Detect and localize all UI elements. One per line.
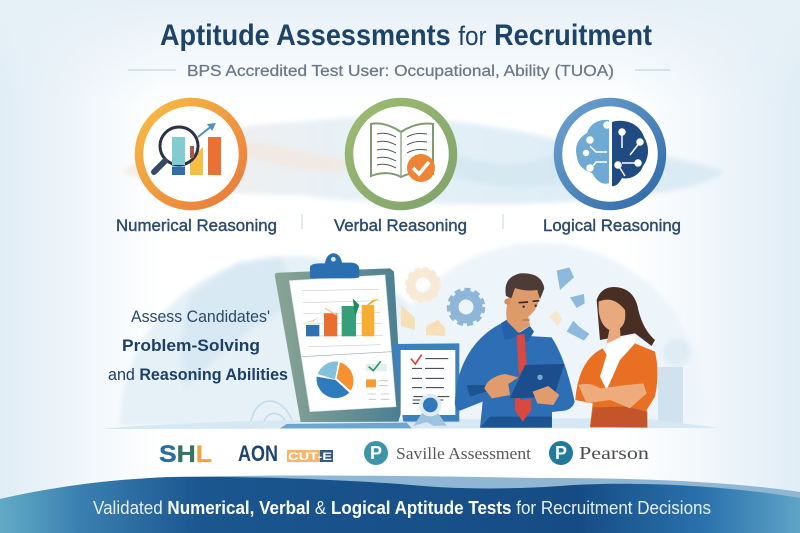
certificate bbox=[392, 343, 459, 426]
title: Aptitude Assessments for Recruitment bbox=[160, 19, 652, 52]
clipboard paper bbox=[289, 275, 396, 412]
gear: beige bbox=[407, 269, 439, 301]
certificate seal bbox=[413, 413, 447, 426]
necktie bbox=[515, 334, 531, 422]
logo: Pearson: Pearson bbox=[579, 443, 649, 463]
subtitle: BPS Accredited Test User: Occupational, Ability (TUOA) bbox=[187, 63, 614, 80]
clipboard clip bbox=[310, 253, 359, 278]
checklist on clipboard bbox=[366, 361, 389, 399]
bar chart bbox=[305, 298, 379, 336]
label: logical reasoning: Logical Reasoning bbox=[543, 216, 681, 235]
logo: Pearson bbox=[549, 441, 649, 465]
text block: assess candidates: and Reasoning Abilities bbox=[108, 365, 288, 384]
background globe and skyline behind lower section bbox=[120, 243, 705, 429]
tablet bbox=[510, 364, 564, 398]
logo: SHL: SHL bbox=[159, 441, 212, 468]
logo: Saville Assessment: Saville Assessment bbox=[396, 444, 531, 463]
logo: Pearson: P bbox=[555, 443, 567, 463]
woman bbox=[575, 287, 657, 428]
people illustration bbox=[455, 267, 657, 428]
logo: AON CUT-E bbox=[238, 441, 333, 466]
clipboard board bbox=[275, 268, 402, 422]
icon: verbal reasoning bbox=[349, 102, 453, 206]
footer banner bbox=[0, 475, 800, 533]
text block: assess candidates bbox=[108, 307, 288, 384]
footer text: Validated Numerical, Verbal & Logical Aptitude Tests for Recruitment Decisions bbox=[93, 498, 711, 518]
gear: blue bbox=[449, 290, 483, 324]
icon: numerical reasoning bbox=[139, 102, 243, 206]
floating paper shapes bbox=[549, 267, 589, 341]
logo: AON CUT-E: CUT-E bbox=[288, 451, 332, 463]
text block: assess candidates: Assess Candidates' bbox=[131, 307, 270, 326]
background wave behind icons bbox=[120, 117, 725, 204]
label: verbal reasoning: Verbal Reasoning bbox=[334, 216, 467, 235]
label: numerical reasoning: Numerical Reasoning bbox=[116, 216, 277, 235]
ground line bbox=[100, 418, 720, 429]
icon: logical reasoning bbox=[558, 102, 662, 206]
logo: Saville Assessment bbox=[364, 441, 531, 465]
logo: AON CUT-E: AON bbox=[238, 441, 278, 466]
clipboard with charts bbox=[275, 253, 459, 428]
man bbox=[455, 273, 575, 428]
pie chart bbox=[317, 361, 353, 398]
floating shapes beside gears bbox=[401, 305, 445, 336]
logo: Saville Assessment: P bbox=[370, 443, 382, 463]
text block: assess candidates: Problem-Solving bbox=[122, 336, 260, 355]
